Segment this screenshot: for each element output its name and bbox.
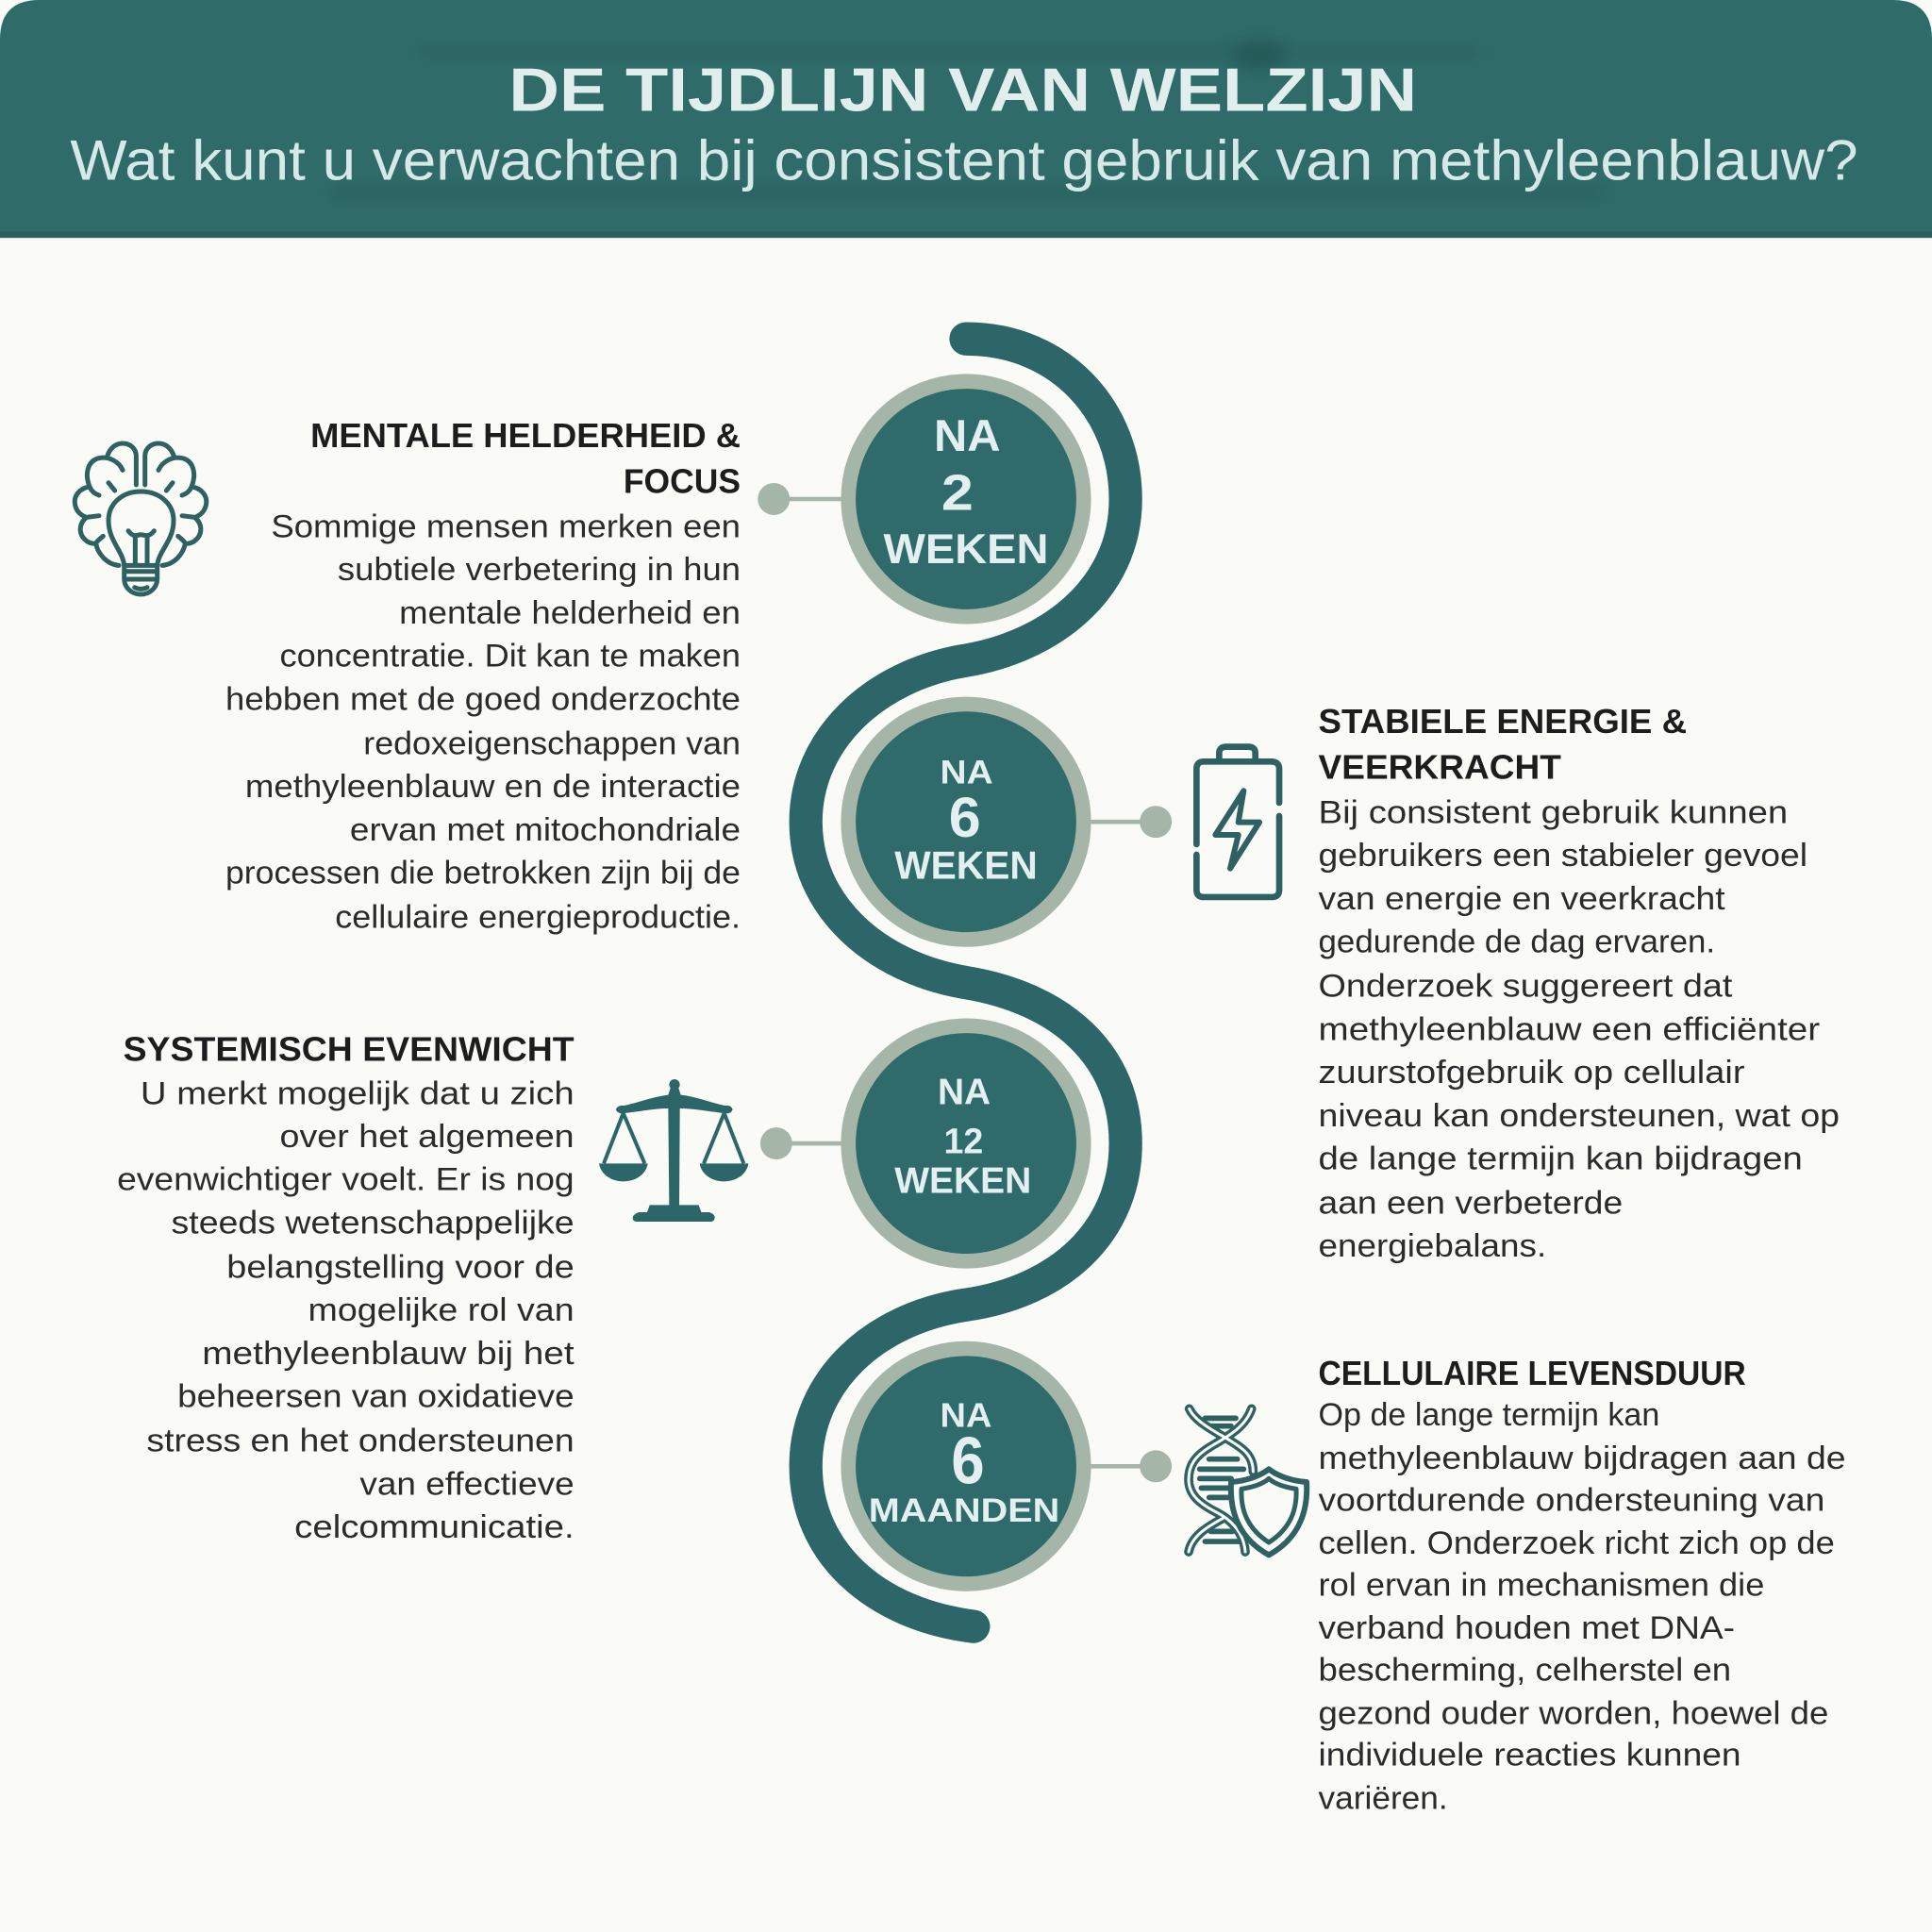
text block: mentale helderheid: MENTALE HELDERHEID & — [310, 416, 741, 455]
text block: cellulaire levensduur: methyleenblauw bijdragen aan de — [1319, 1441, 1846, 1476]
text block: mentale helderheid: redoxeigenschappen van — [363, 725, 741, 761]
milestone: na 2 weken: NA — [934, 410, 1001, 460]
text block: stabiele energie — [1319, 702, 1840, 1264]
milestone: na 2 weken: WEKEN — [883, 526, 1049, 573]
text block: systemisch evenwicht: belangstelling voor de — [226, 1249, 575, 1285]
text block: stabiele energie: aan een verbeterde — [1319, 1186, 1623, 1222]
text block: cellulaire levensduur: gezond ouder worden, hoewel de — [1319, 1695, 1828, 1731]
text block: cellulaire levensduur: variëren. — [1319, 1780, 1448, 1816]
text block: systemisch evenwicht: over het algemeen — [279, 1119, 575, 1155]
text block: systemisch evenwicht: beheersen van oxidatieve — [177, 1379, 575, 1415]
text block: mentale helderheid: cellulaire energieproductie. — [335, 900, 741, 936]
text block: systemisch evenwicht: steeds wetenschappelijke — [172, 1205, 575, 1241]
milestone: na 12 weken: WEKEN — [894, 1160, 1031, 1201]
text block: systemisch evenwicht: SYSTEMISCH EVENWICHT — [124, 1030, 575, 1069]
text block: cellulaire levensduur: bescherming, celherstel en — [1319, 1653, 1731, 1689]
text block: stabiele energie: STABIELE ENERGIE & — [1319, 702, 1687, 741]
milestone: na 6 weken: NA — [941, 755, 993, 791]
text block: stabiele energie: niveau kan ondersteunen, wat op — [1319, 1098, 1840, 1134]
icon: battery with bolt — [1196, 747, 1279, 897]
milestone: na 12 weken — [760, 1025, 1084, 1261]
text block: mentale helderheid: hebben met de goed onderzochte — [225, 681, 741, 717]
text block: stabiele energie: VEERKRACHT — [1319, 747, 1561, 786]
icon: brain with light bulb — [75, 443, 207, 594]
milestone: na 6 weken — [848, 704, 1172, 940]
milestone: na 6 weken: WEKEN — [894, 842, 1038, 887]
text block: stabiele energie: de lange termijn kan bijdragen — [1319, 1141, 1803, 1177]
text block: stabiele energie: Bij consistent gebruik kunnen — [1319, 794, 1788, 830]
icon: balance scales — [599, 1079, 748, 1222]
serpentine timeline path — [806, 339, 1125, 1626]
milestone: na 12 weken: 12 — [943, 1123, 983, 1162]
text block: stabiele energie: Onderzoek suggereert dat — [1319, 969, 1733, 1005]
text block: cellulaire levensduur: Op de lange termijn kan — [1319, 1397, 1659, 1433]
text block: systemisch evenwicht — [117, 1030, 575, 1545]
text block: systemisch evenwicht: mogelijke rol van — [308, 1292, 575, 1328]
subtitle: Wat kunt u verwachten bij consistent gebruik van methyleenblauw? — [70, 129, 1858, 192]
icon: dna with shield — [1189, 1408, 1307, 1555]
text block: stabiele energie: gedurende de dag ervaren. — [1319, 924, 1715, 960]
text block: systemisch evenwicht: evenwichtiger voelt. Er is nog — [117, 1162, 575, 1198]
text block: stabiele energie: gebruikers een stabieler gevoel — [1319, 838, 1807, 874]
text block: mentale helderheid — [225, 416, 741, 936]
milestone: na 6 maanden: NA — [941, 1395, 991, 1434]
milestone: na 6 maanden — [848, 1349, 1172, 1584]
text block: mentale helderheid: ervan met mitochondriale — [350, 812, 741, 848]
milestone: na 6 maanden: 6 — [951, 1424, 985, 1498]
text block: stabiele energie: zuurstofgebruik op cellulair — [1319, 1055, 1744, 1091]
text block: cellulaire levensduur: individuele reacties kunnen — [1319, 1738, 1741, 1774]
text block: stabiele energie: van energie en veerkracht — [1319, 881, 1725, 917]
text block: mentale helderheid: mentale helderheid en — [399, 595, 741, 631]
milestone: na 6 weken: 6 — [949, 786, 981, 849]
text block: mentale helderheid: Sommige mensen merken een — [271, 508, 741, 544]
text block: cellulaire levensduur: CELLULAIRE LEVENSDUUR — [1319, 1354, 1746, 1392]
text block: stabiele energie: energiebalans. — [1319, 1228, 1546, 1264]
header banner — [0, 0, 1932, 238]
milestone: na 2 weken — [758, 381, 1084, 617]
text block: mentale helderheid: concentratie. Dit kan te maken — [279, 639, 741, 675]
text block: cellulaire levensduur — [1319, 1354, 1846, 1816]
milestone: na 12 weken: NA — [938, 1072, 991, 1112]
text block: stabiele energie: methyleenblauw een efficiënter — [1319, 1011, 1820, 1047]
text block: mentale helderheid: processen die betrokken zijn bij de — [225, 855, 741, 891]
text block: systemisch evenwicht: U merkt mogelijk dat u zich — [141, 1075, 575, 1111]
text block: systemisch evenwicht: stress en het ondersteunen — [146, 1424, 575, 1459]
milestone: na 6 maanden: MAANDEN — [869, 1492, 1059, 1529]
milestone: na 2 weken: 2 — [941, 466, 974, 522]
text block: cellulaire levensduur: cellen. Onderzoek richt zich op de — [1319, 1525, 1835, 1561]
title: DE TIJDLIJN VAN WELZIJN — [508, 56, 1417, 125]
text block: cellulaire levensduur: voortdurende ondersteuning van — [1319, 1482, 1824, 1518]
text block: systemisch evenwicht: methyleenblauw bij het — [202, 1336, 575, 1372]
text block: mentale helderheid: methyleenblauw en de interactie — [245, 769, 741, 805]
text block: systemisch evenwicht: van effectieve — [359, 1466, 575, 1502]
text block: systemisch evenwicht: celcommunicatie. — [294, 1509, 575, 1545]
text block: mentale helderheid: subtiele verbetering in hun — [338, 552, 741, 588]
text block: cellulaire levensduur: verband houden met DNA- — [1319, 1610, 1735, 1646]
text block: mentale helderheid: FOCUS — [624, 461, 741, 500]
text block: cellulaire levensduur: rol ervan in mechanismen die — [1319, 1567, 1764, 1603]
